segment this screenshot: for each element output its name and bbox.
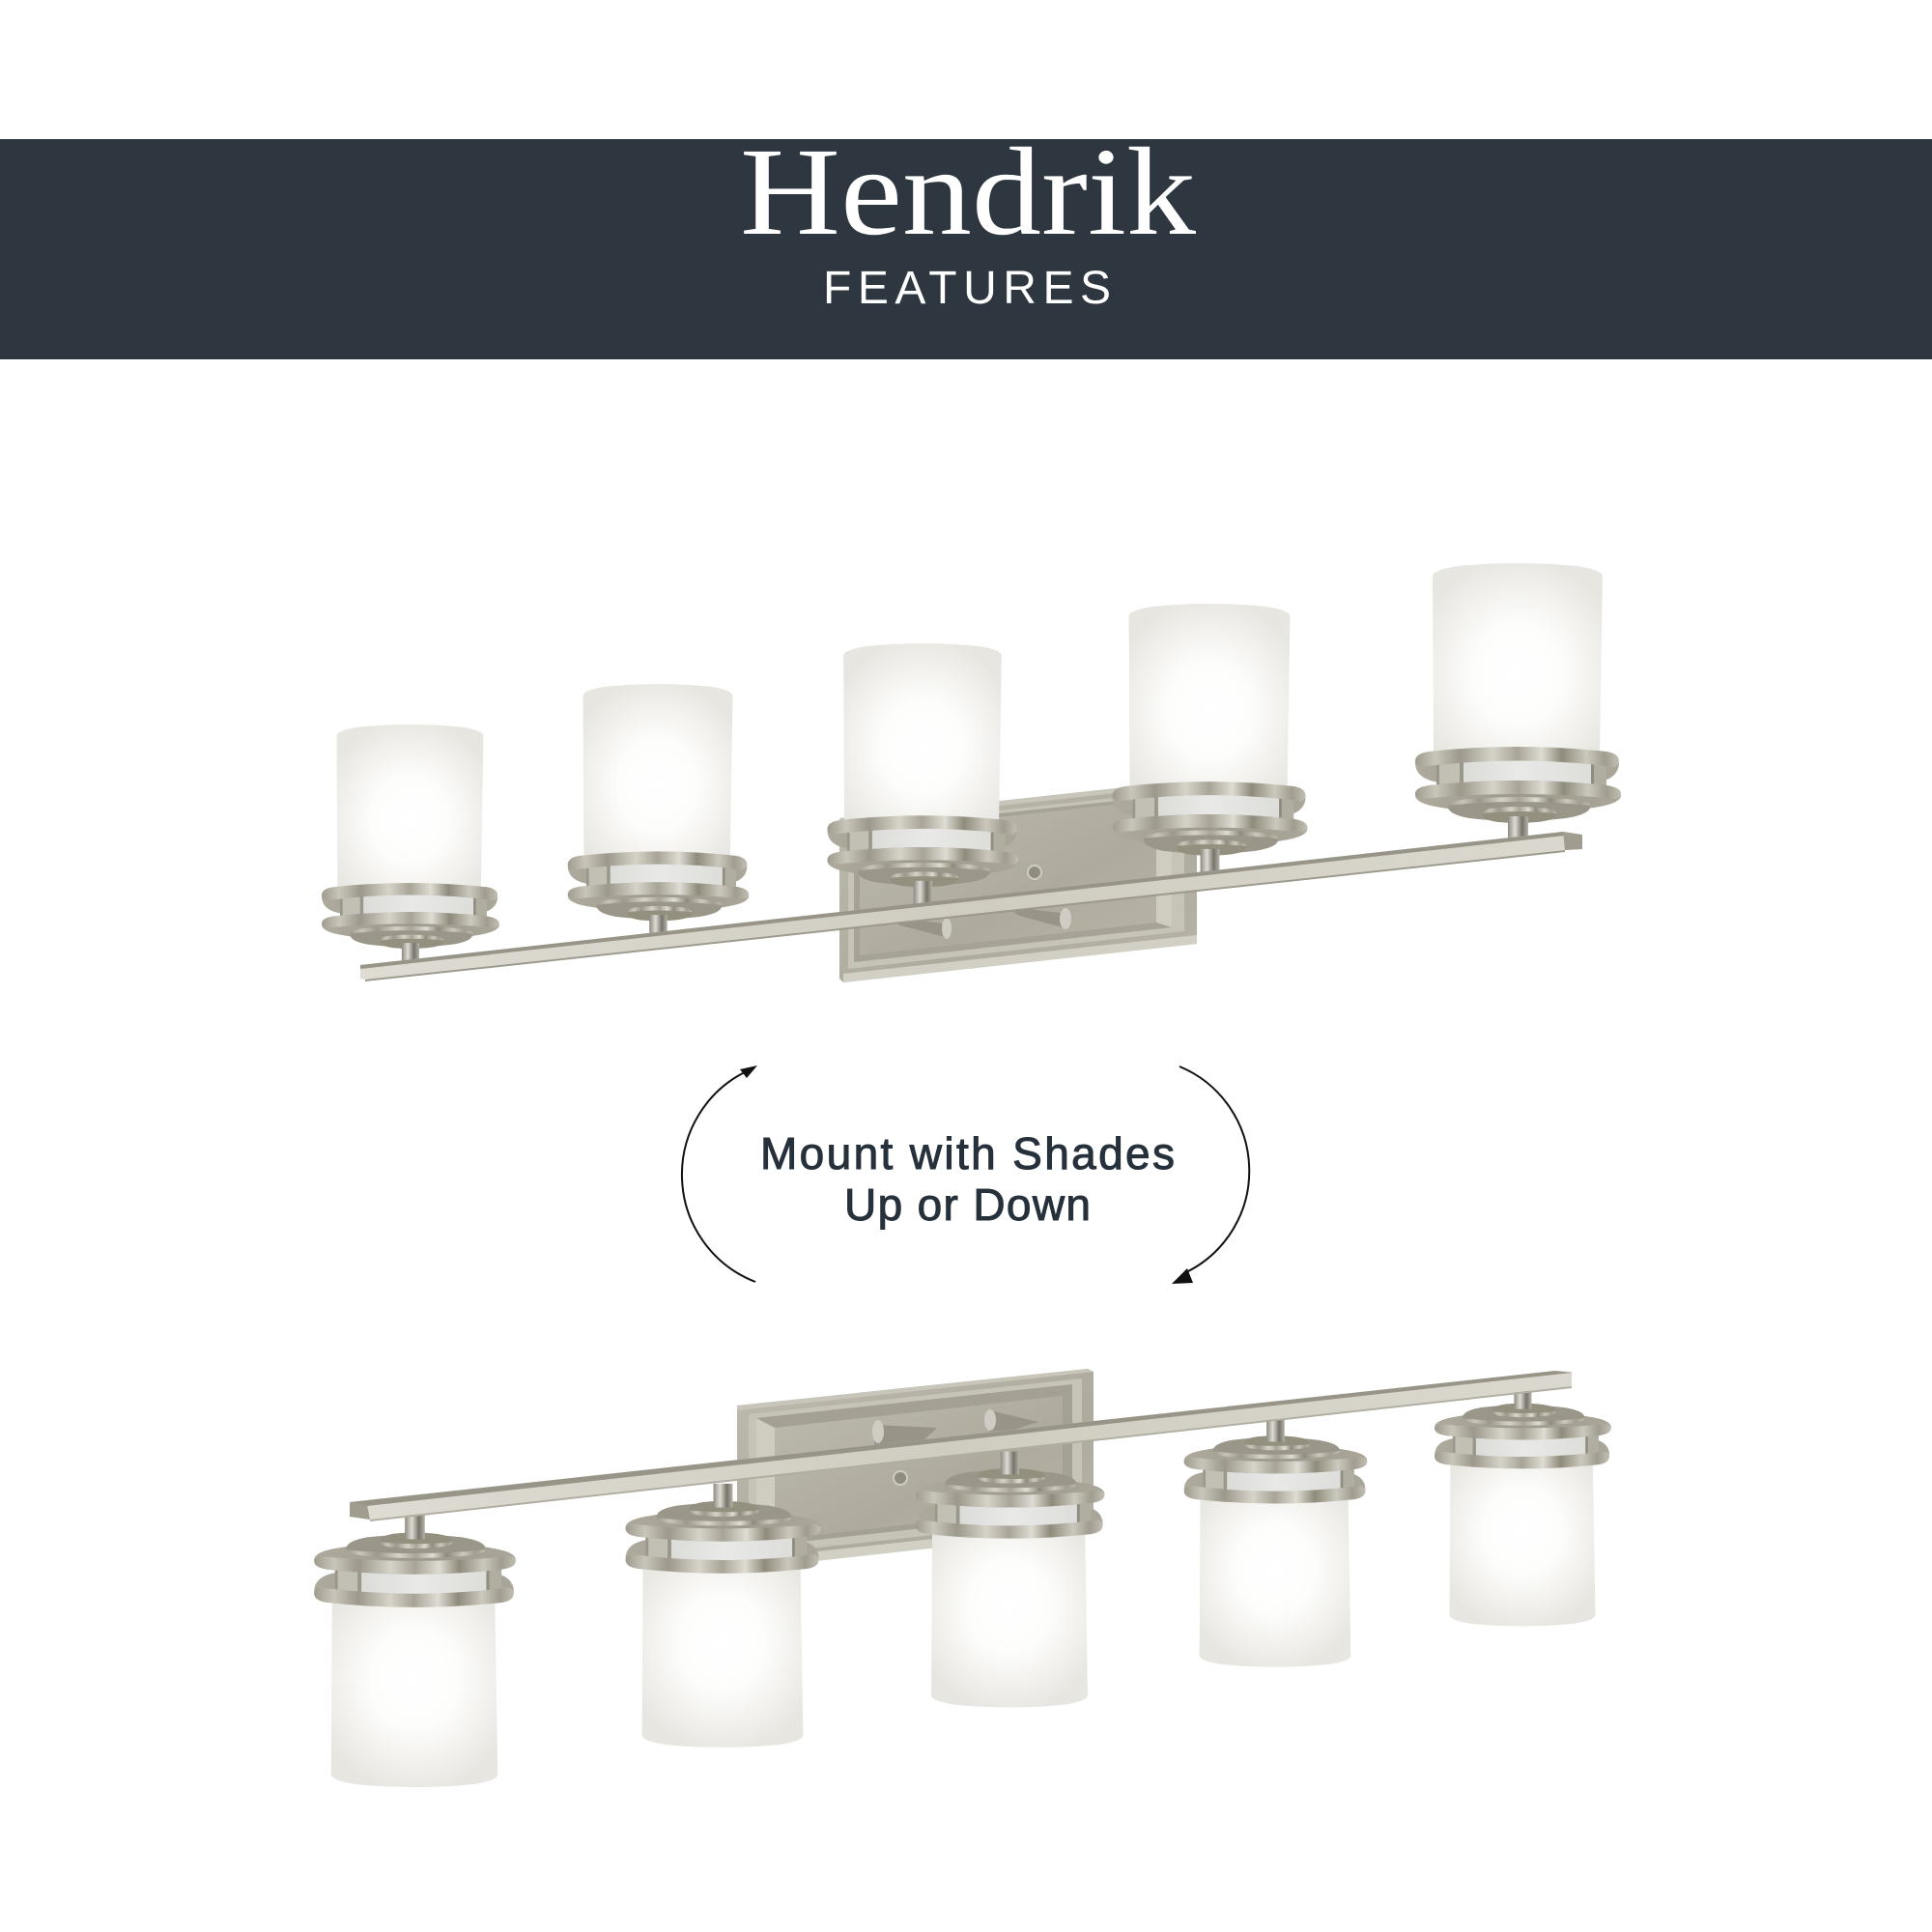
lamp 1 <box>314 1515 516 1787</box>
right arm <box>984 1409 1038 1432</box>
title: Hendrik: Hendrik <box>740 123 1196 262</box>
crossbar <box>360 832 1582 981</box>
lamp 5 <box>1415 563 1621 841</box>
title banner <box>0 123 1932 359</box>
fixture: shades up <box>322 563 1621 982</box>
mounting plate <box>839 780 1197 982</box>
mounting plate <box>737 1369 1094 1570</box>
subtitle: FEATURES: FEATURES <box>823 263 1111 314</box>
lamp 4 <box>1184 1419 1367 1667</box>
lamp 2 <box>568 684 749 938</box>
left arm <box>872 1420 937 1447</box>
screw <box>1028 866 1041 879</box>
left arm <box>885 916 952 939</box>
lamp 3 <box>827 643 1019 904</box>
crossbar <box>350 1371 1572 1521</box>
caption: Mount with Shades <box>760 1128 1175 1179</box>
arrow: left arc <box>682 1065 757 1282</box>
screw <box>894 1471 907 1485</box>
lamp 1 <box>322 724 499 965</box>
fixture: shades down <box>314 1369 1611 1787</box>
lamp 5 <box>1435 1387 1611 1626</box>
right arm <box>1005 906 1071 929</box>
lamp 4 <box>1113 604 1307 873</box>
lamp 2 <box>626 1484 820 1747</box>
rotation arrows and caption <box>682 1065 1249 1284</box>
lamp 3 <box>915 1452 1104 1707</box>
caption: Up or Down <box>844 1179 1091 1230</box>
arrow: right arc <box>1172 1066 1249 1284</box>
